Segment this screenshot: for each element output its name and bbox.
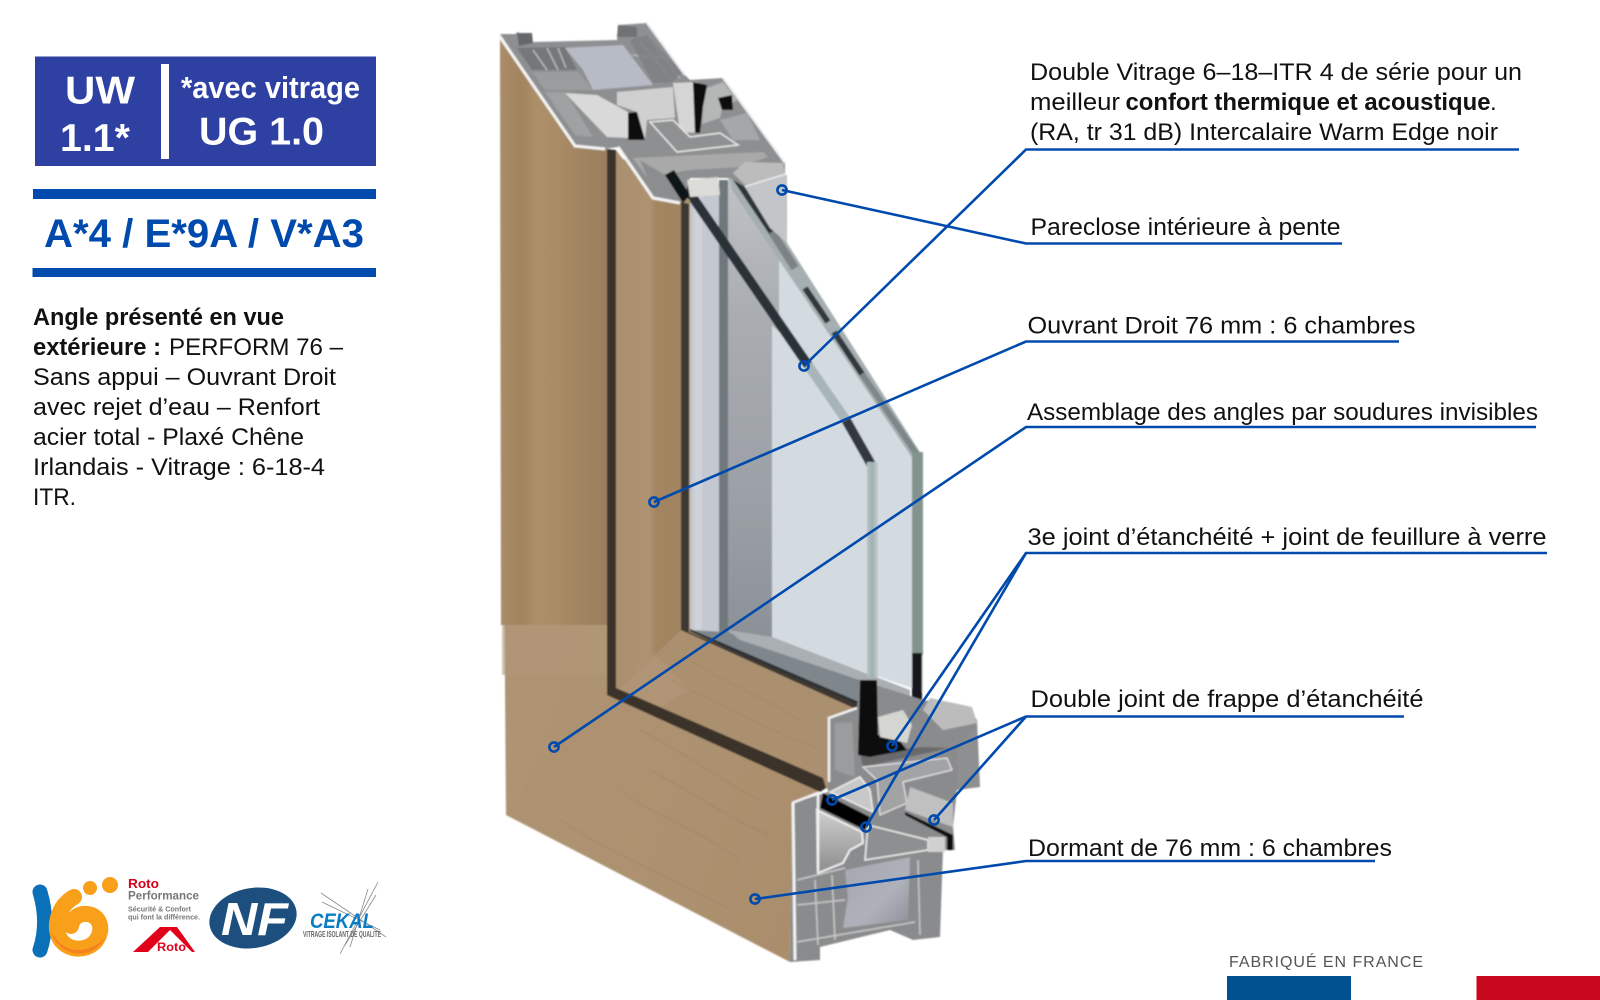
- callout: sash 76 mm: [649, 312, 1416, 507]
- text block: angle description: PERFORM 76 –: [169, 334, 344, 361]
- wood grain upper frame: [500, 36, 770, 910]
- callout: frame 76 mm: [750, 835, 1392, 904]
- rear pane bead: [745, 175, 787, 243]
- text block: angle description: Sans appui – Ouvrant Droit: [33, 364, 336, 391]
- footer: made in France: [1227, 952, 1600, 1000]
- footer: made in France: FABRIQUÉ EN FRANCE: [1229, 952, 1423, 971]
- logo: Roto Performance: [128, 876, 200, 954]
- callout: double strike seal: Double joint de frappe d’étanchéité: [1030, 686, 1424, 713]
- callout: double strike seal: [827, 686, 1424, 825]
- front and rear pane edges: [867, 452, 923, 708]
- logo: CEKAL: CEKAL: [310, 910, 374, 933]
- callout: frame 76 mm: Dormant de 76 mm : 6 chambres: [1028, 835, 1392, 862]
- callout: sloped interior glazing bead: [777, 185, 1342, 244]
- callout: double glazing: Double Vitrage 6–18–ITR 4 de série pour un: [1030, 59, 1522, 86]
- glass area: [684, 175, 923, 706]
- illustration: window corner cross-section: [500, 23, 980, 962]
- text: UW: UW: [65, 70, 135, 112]
- callout: double glazing: .: [1490, 89, 1497, 116]
- logo: NF: [204, 881, 302, 955]
- logo: Roto Performance: Sécurité & Confort: [128, 906, 192, 914]
- text block: angle description: [33, 304, 344, 511]
- callout: double glazing: confort thermique et acoustique: [1126, 89, 1490, 116]
- callout: third seal: [861, 524, 1547, 832]
- text block: angle description: ITR.: [33, 484, 76, 511]
- outer wood frame: [500, 36, 823, 962]
- text block: angle description: extérieure :: [33, 334, 161, 361]
- callout: sloped interior glazing bead: Pareclose intérieure à pente: [1030, 214, 1340, 241]
- dark gaskets between frame and sash: [607, 149, 860, 792]
- logo: Roto Performance: Roto: [157, 940, 186, 954]
- logo: Roto Performance: qui font la différence.: [128, 914, 200, 922]
- text: UG 1.0: UG 1.0: [199, 110, 324, 154]
- flag: blue band: [1227, 976, 1351, 1000]
- inner wood sash: [616, 150, 857, 782]
- logo: CEKAL: [303, 882, 386, 954]
- logo: CEKAL: VITRAGE ISOLANT DE QUALITE: [303, 929, 381, 939]
- panel: performance values badge: [35, 56, 376, 166]
- callout: double glazing: [799, 59, 1522, 371]
- callout: corner assembly: [549, 399, 1538, 752]
- callout: third seal: 3e joint d’étanchéité + joint de feuillure à verre: [1028, 524, 1546, 551]
- bottom profile section: [790, 680, 980, 962]
- sash wood backing: [607, 149, 830, 790]
- heading: A*4 / E*9A / V*A3: A*4 / E*9A / V*A3: [44, 212, 364, 256]
- logos: certifications: [40, 876, 386, 955]
- logo: Roto Performance: Roto: [128, 876, 159, 891]
- text: 1.1*: 1.1*: [60, 117, 131, 160]
- flag: red band: [1476, 976, 1600, 1000]
- callout: double glazing: meilleur: [1030, 89, 1120, 116]
- top profile section: [500, 23, 785, 203]
- glass edge bands: [676, 172, 923, 464]
- logo: 16 years warranty: [40, 877, 118, 954]
- logo: Roto Performance: Performance: [128, 888, 199, 902]
- callout: double glazing: (RA, tr 31 dB) Intercalaire Warm Edge noir: [1030, 119, 1498, 146]
- callout: corner assembly: Assemblage des angles par soudures invisibles: [1027, 399, 1538, 426]
- callout: sash 76 mm: Ouvrant Droit 76 mm : 6 chambres: [1028, 312, 1416, 340]
- text: avec vitrage: *avec vitrage: [181, 70, 360, 105]
- text block: angle description: Angle présenté en vue: [33, 304, 284, 331]
- logo: NF: NF: [221, 893, 290, 945]
- text block: angle description: acier total - Plaxé Chêne: [33, 424, 304, 451]
- text block: angle description: avec rejet d’eau – Renfort: [33, 394, 320, 421]
- text block: angle description: Irlandais - Vitrage : 6-18-4: [33, 454, 325, 481]
- divider: [161, 64, 169, 159]
- panel: AEV classification: [32, 189, 376, 277]
